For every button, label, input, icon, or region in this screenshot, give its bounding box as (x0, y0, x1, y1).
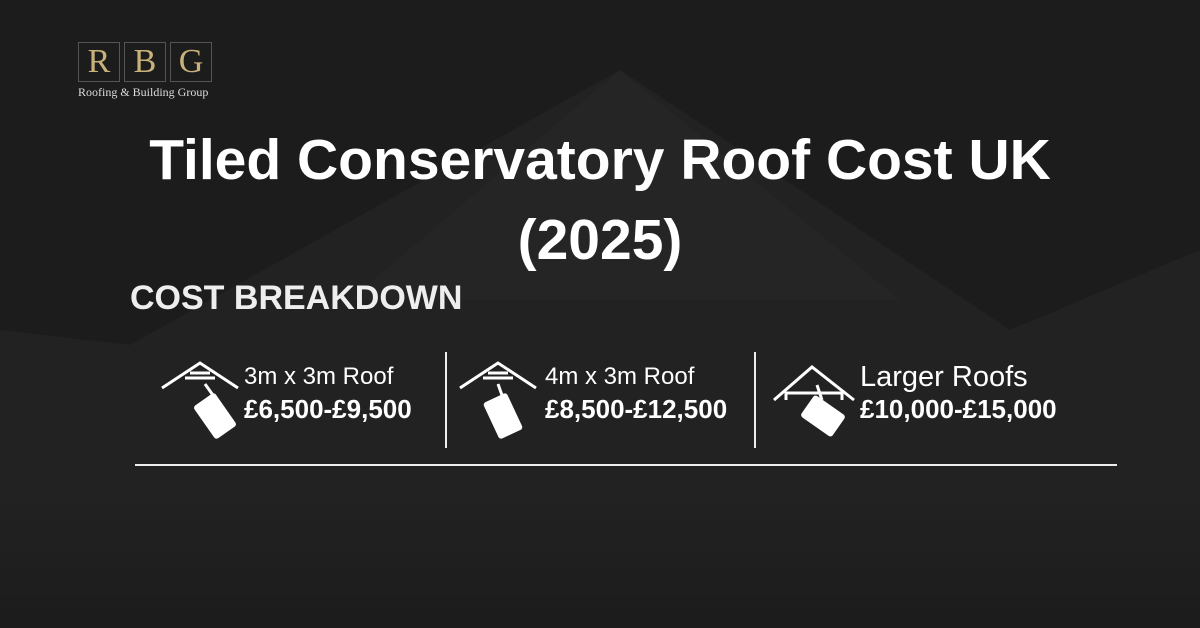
logo (78, 42, 212, 99)
item: 3m x 3m (161, 361, 412, 439)
heading: cost breakdown: COST BREAKDOWN (130, 279, 462, 317)
title: (2025) (518, 208, 682, 272)
title: Tiled Conservatory Roof Cost UK (149, 128, 1051, 192)
icon: roof price tag (773, 365, 855, 436)
title (149, 128, 1051, 272)
item: 4m x 3m (459, 361, 727, 439)
item: 4m x 3m: £8,500-£12,500 (545, 394, 727, 424)
item: 3m x 3m: 3m x 3m Roof (244, 363, 393, 390)
item: 4m x 3m: 4m x 3m Roof (545, 363, 694, 390)
logo: Roofing & Building Group (78, 85, 208, 99)
item: 3m x 3m: £6,500-£9,500 (244, 394, 412, 424)
icon: roof price tag (459, 361, 537, 439)
item: larger roofs: £10,000-£15,000 (860, 394, 1057, 424)
item: larger roofs (773, 361, 1057, 436)
horizontal rule (135, 464, 1117, 466)
logo: R (88, 43, 110, 80)
logo: B (134, 43, 156, 80)
logo: G (179, 43, 203, 80)
item: larger roofs: Larger Roofs (860, 361, 1028, 393)
divider (754, 352, 756, 448)
divider (445, 352, 447, 448)
icon: roof price tag (161, 361, 239, 439)
